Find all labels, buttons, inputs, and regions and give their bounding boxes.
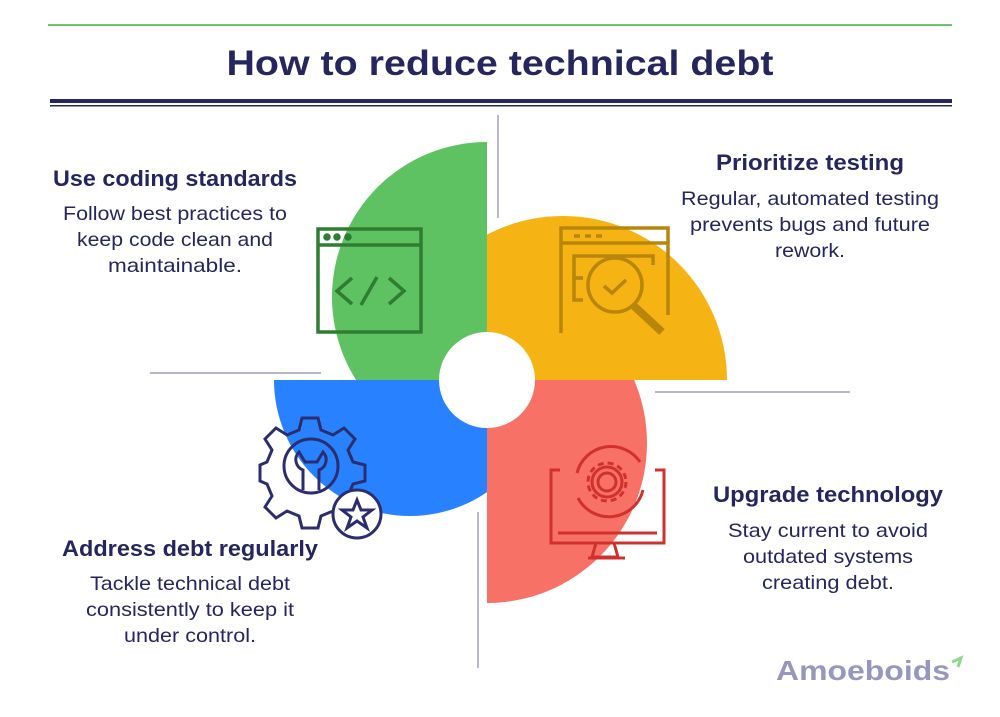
text: prioritize testing: prevents bugs and future: [690, 214, 930, 236]
text: prioritize testing: [681, 150, 939, 262]
text: use coding standards: Use coding standards: [53, 166, 297, 191]
icon: upgrade monitor gear: [551, 447, 664, 558]
text: use coding standards: Follow best practices to: [63, 203, 287, 225]
text: address debt regularly: Tackle technical debt: [90, 573, 291, 595]
text: upgrade technology: [713, 482, 944, 594]
text: upgrade technology: Upgrade technology: [713, 482, 944, 507]
text: prioritize testing: Prioritize testing: [716, 150, 904, 175]
text: address debt regularly: consistently to keep it: [86, 599, 295, 621]
text: upgrade technology: Stay current to avoid: [728, 520, 928, 542]
text: prioritize testing: rework.: [775, 240, 845, 262]
text: upgrade technology: outdated systems: [743, 546, 913, 568]
text: upgrade technology: creating debt.: [762, 572, 894, 594]
logo: Amoeboids: [776, 655, 950, 686]
text: use coding standards: keep code clean and: [77, 229, 273, 251]
text: address debt regularly: [62, 536, 319, 647]
icon: code window: [318, 229, 421, 332]
text: address debt regularly: under control.: [124, 625, 256, 647]
text: use coding standards: maintainable.: [108, 255, 242, 277]
icon: gear with wrench and star: [260, 418, 381, 538]
text: address debt regularly: Address debt regularly: [62, 536, 319, 561]
icon: testing magnifier: [561, 228, 668, 333]
pinwheel chart: [274, 142, 727, 603]
text: use coding standards: [53, 166, 297, 277]
title: How to reduce technical debt: [226, 44, 774, 83]
text: prioritize testing: Regular, automated testing: [681, 188, 939, 210]
